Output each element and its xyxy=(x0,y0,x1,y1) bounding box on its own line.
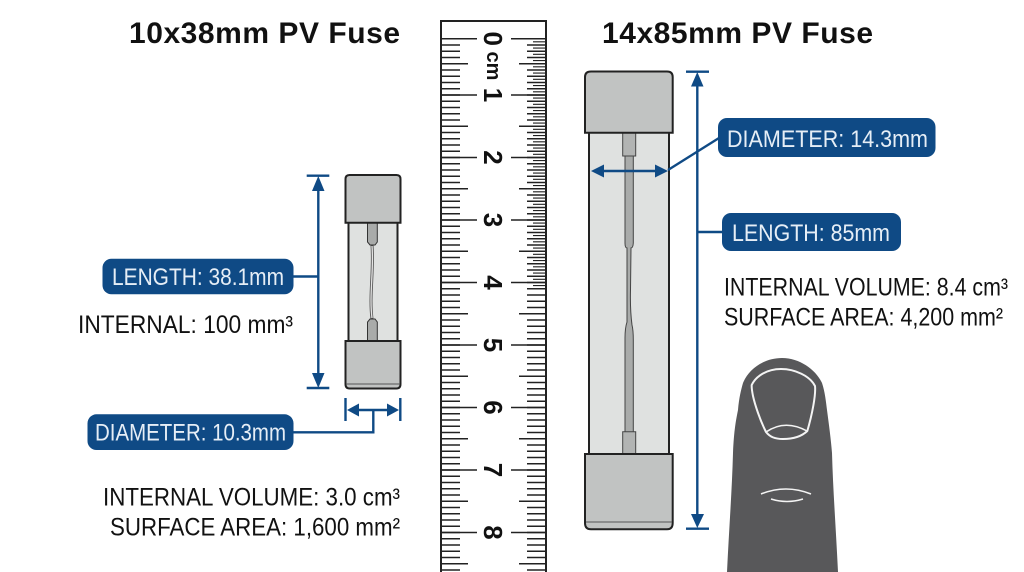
large fuse length arrow xyxy=(686,72,709,529)
small fuse length callout: LENGTH: 38.1mm xyxy=(112,264,284,291)
large fuse illustration xyxy=(585,72,673,529)
title: 10x38mm PV Fuse: 10x38mm PV Fuse xyxy=(129,17,400,50)
icon: finger for scale xyxy=(727,358,838,572)
small fuse diameter callout: DIAMETER: 10.3mm xyxy=(95,420,286,446)
ruler: 4 xyxy=(478,275,508,290)
small fuse length callout xyxy=(102,259,318,294)
large fuse length callout: LENGTH: 85mm xyxy=(732,220,890,247)
small fuse specifications xyxy=(103,484,400,542)
large fuse specifications xyxy=(724,274,1008,332)
ruler: cm xyxy=(482,52,504,80)
ruler xyxy=(441,21,546,572)
ruler: 8 xyxy=(478,525,508,540)
large fuse diameter arrow xyxy=(591,164,668,178)
large fuse diameter callout: DIAMETER: 14.3mm xyxy=(727,126,928,153)
ruler: 2 xyxy=(478,150,508,165)
small fuse specifications: SURFACE AREA: 1,600 mm² xyxy=(110,514,400,542)
small fuse length arrow xyxy=(307,176,329,388)
ruler: 0 xyxy=(478,31,508,46)
large fuse length callout xyxy=(697,213,901,251)
small fuse diameter arrow xyxy=(346,398,400,421)
ruler: 5 xyxy=(478,338,508,352)
small fuse diameter callout xyxy=(88,410,373,450)
small fuse specifications: INTERNAL VOLUME: 3.0 cm³ xyxy=(103,484,400,512)
large fuse diameter callout xyxy=(668,118,936,170)
ruler: 7 xyxy=(478,463,508,477)
title: 14x85mm PV Fuse: 14x85mm PV Fuse xyxy=(602,17,873,50)
small fuse illustration xyxy=(346,175,400,388)
ruler: 3 xyxy=(478,213,508,227)
ruler: 1 xyxy=(478,88,508,102)
ruler: 6 xyxy=(478,400,508,415)
internal volume note, small fuse: INTERNAL: 100 mm³ xyxy=(78,311,293,339)
